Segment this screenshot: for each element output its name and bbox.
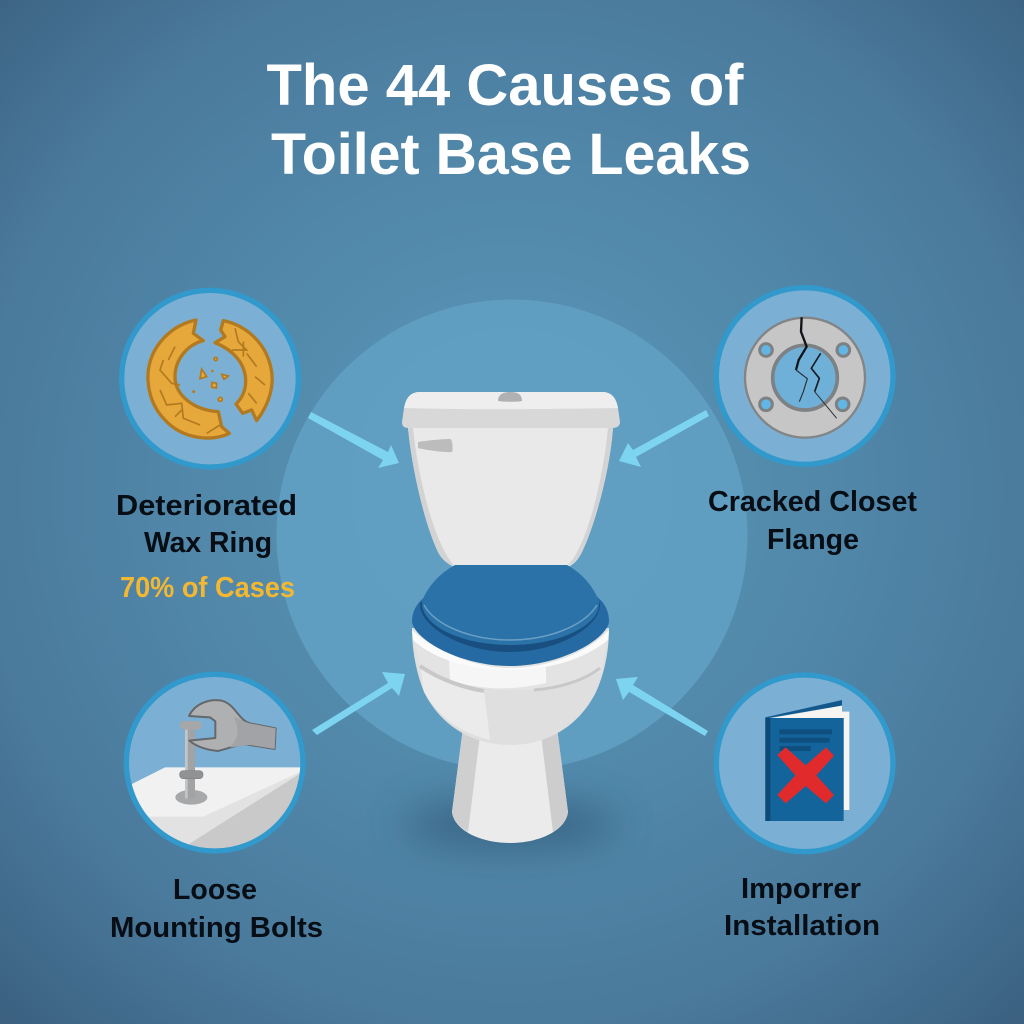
toilet shadow xyxy=(402,800,618,848)
central halo circle xyxy=(276,300,748,770)
icon: improper installation manual xyxy=(716,675,893,852)
arrow: bolts to bowl xyxy=(312,672,405,735)
title xyxy=(266,53,751,187)
arrow: wax ring to tank xyxy=(308,412,399,468)
label: loose mounting bolts: Mounting Bolts xyxy=(110,912,323,944)
toilet lid xyxy=(422,565,599,645)
label: improper installation: Imporrer xyxy=(741,873,861,905)
toilet bowl xyxy=(412,628,609,745)
label: cracked closet flange: Flange xyxy=(767,524,859,556)
tank lid xyxy=(402,392,620,428)
label: cracked closet flange xyxy=(708,486,917,556)
title: The 44 Causes of xyxy=(266,53,744,118)
toilet illustration xyxy=(402,392,620,843)
label: improper installation: Installation xyxy=(724,910,880,942)
label: cracked closet flange: Cracked Closet xyxy=(708,486,917,518)
icon: deteriorated wax ring xyxy=(122,290,298,467)
toilet tank xyxy=(408,428,613,567)
icon: loose mounting bolts xyxy=(123,674,310,860)
toilet seat xyxy=(412,596,609,666)
label: loose mounting bolts: Loose xyxy=(173,874,257,906)
arrow: flange to tank xyxy=(619,410,709,467)
label: improper installation xyxy=(724,873,880,942)
label: loose mounting bolts xyxy=(110,874,323,944)
arrow: installation to bowl xyxy=(616,677,708,736)
label: deteriorated wax ring xyxy=(116,490,297,604)
toilet pedestal xyxy=(452,728,568,843)
icon: cracked closet flange xyxy=(716,288,893,464)
label: deteriorated wax ring: Deteriorated xyxy=(116,490,297,522)
title: Toilet Base Leaks xyxy=(271,122,751,187)
callout: 70% of cases: 70% of Cases xyxy=(120,572,295,604)
label: deteriorated wax ring: Wax Ring xyxy=(144,527,272,559)
